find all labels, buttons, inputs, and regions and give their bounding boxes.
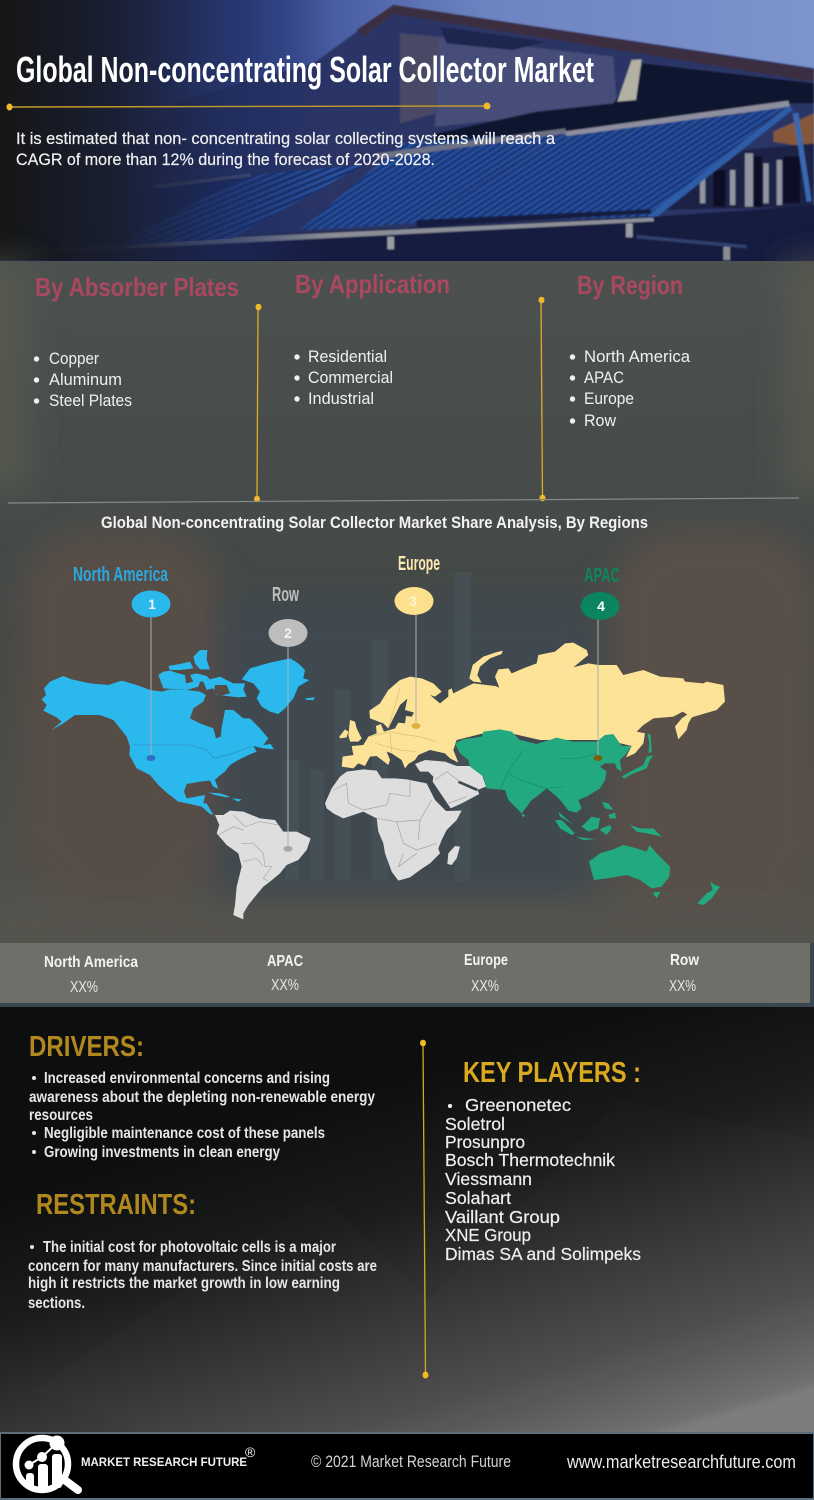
region: South America [215, 811, 311, 919]
intro text: It is estimated that non- concentrating solar collecting systems will reach a [16, 129, 556, 148]
column: North America share: XX% [70, 979, 98, 996]
map heading: Global Non-concentrating Solar Collector Market Share Analysis, By Regions [101, 514, 648, 532]
region: Africa and Middle East [325, 760, 486, 881]
list: regions: APAC [584, 368, 624, 387]
heading: restraints: RESTRAINTS: [36, 1189, 196, 1221]
list: applications: Commercial [308, 368, 393, 387]
column: Row share: XX% [669, 978, 696, 995]
list: applications: Industrial [308, 389, 374, 408]
callout: North America [73, 564, 170, 761]
callout: Europe: 3 [409, 593, 417, 609]
key players list [445, 1095, 641, 1264]
title divider with gold dots [6, 102, 490, 110]
callout: APAC [580, 565, 620, 761]
panel: By Application [294, 269, 450, 408]
panel: drivers, restraints and key players [0, 1007, 814, 1433]
column: North America share [44, 954, 138, 996]
list: absorber plates [34, 349, 132, 410]
list: regions [570, 347, 691, 430]
panel: By Region [570, 270, 691, 430]
key players list: XNE Group [445, 1225, 531, 1245]
drivers list: awareness about the depleting non-renewable energy [29, 1089, 375, 1106]
list: regions: North America [584, 347, 691, 366]
column: North America share: North America [44, 954, 138, 971]
column: Row share [669, 952, 700, 995]
callout: APAC: APAC [584, 565, 620, 587]
gold column divider left [254, 304, 262, 502]
key players list: Prosunpro [445, 1132, 525, 1152]
intro text [16, 129, 556, 169]
intro text: CAGR of more than 12% during the forecast of 2020-2028. [16, 150, 435, 169]
column: Row share: Row [670, 952, 700, 969]
callout: Row: 2 [284, 625, 292, 641]
restraints section [28, 1189, 377, 1312]
list: applications: Residential [308, 347, 387, 366]
callout: Europe [394, 553, 440, 729]
heading: By Absorber Plates: By Absorber Plates [35, 272, 239, 302]
drivers list [29, 1070, 375, 1161]
callout: APAC: 4 [597, 598, 605, 614]
list: applications [294, 347, 393, 408]
key players list: Viessmann [445, 1169, 532, 1189]
restraints text: high it restricts the market growth in low earning [28, 1275, 340, 1292]
website: www.marketresearchfuture.com [566, 1452, 796, 1472]
column: APAC share: XX% [271, 977, 299, 994]
gold column divider right [538, 297, 546, 501]
restraints text [28, 1239, 377, 1312]
drivers section [29, 1031, 375, 1161]
heading: By Region: By Region [577, 270, 683, 300]
logo icon [16, 1436, 78, 1490]
copyright: © 2021 Market Research Future [311, 1453, 511, 1471]
callout: North America: 1 [148, 596, 156, 612]
key players list: Greenonetec [465, 1095, 571, 1115]
callout: Europe: Europe [398, 553, 440, 575]
key players list: Solahart [445, 1188, 511, 1208]
panel: footer [0, 1432, 814, 1500]
panel: By Absorber Plates [34, 272, 239, 410]
column: Europe share [464, 952, 508, 995]
column: Europe share: Europe [464, 952, 508, 969]
callout: Row: Row [272, 584, 299, 606]
drivers list: Negligible maintenance cost of these panels [44, 1125, 325, 1142]
key players list: Soletrol [445, 1114, 505, 1134]
key players section [445, 1057, 641, 1264]
key players list: Dimas SA and Solimpeks [445, 1244, 641, 1264]
restraints text: sections. [28, 1295, 85, 1312]
column: APAC share [267, 953, 303, 994]
region: APAC [455, 729, 720, 905]
building and solar collector photo [0, 5, 814, 270]
drivers list: Increased environmental concerns and rising [44, 1070, 330, 1087]
panel: segmentation and map background [0, 261, 814, 950]
world map [42, 553, 725, 919]
heading: By Application: By Application [295, 269, 450, 299]
column: Europe share: XX% [471, 978, 499, 995]
key players list: Bosch Thermotechnik [445, 1150, 615, 1170]
list: absorber plates: Copper [49, 349, 99, 368]
callout: Row [268, 584, 308, 852]
panel: hero photo of solar collectors [0, 0, 814, 270]
region: Europe and Russia [339, 643, 725, 768]
heading: key players: KEY PLAYERS : [463, 1057, 641, 1089]
callout: North America: North America [73, 564, 169, 586]
heading: drivers: DRIVERS: [29, 1031, 144, 1063]
list: absorber plates: Aluminum [49, 370, 122, 389]
gold vertical divider [420, 1040, 428, 1378]
restraints text: The initial cost for photovoltaic cells is a major [43, 1239, 336, 1256]
key players list: Vaillant Group [445, 1207, 560, 1227]
drivers list: Growing investments in clean energy [44, 1144, 280, 1161]
restraints text: concern for many manufacturers. Since initial costs are [28, 1258, 377, 1275]
registered mark: ® [245, 1444, 256, 1460]
drivers list: resources [29, 1107, 93, 1124]
panel: market share table [0, 943, 814, 1007]
list: regions: Europe [584, 389, 634, 408]
column: APAC share: APAC [267, 953, 303, 970]
list: absorber plates: Steel Plates [49, 391, 132, 410]
brand name: MARKET RESEARCH FUTURE [81, 1455, 247, 1469]
region: North America [42, 650, 315, 815]
list: regions: Row [584, 411, 617, 430]
